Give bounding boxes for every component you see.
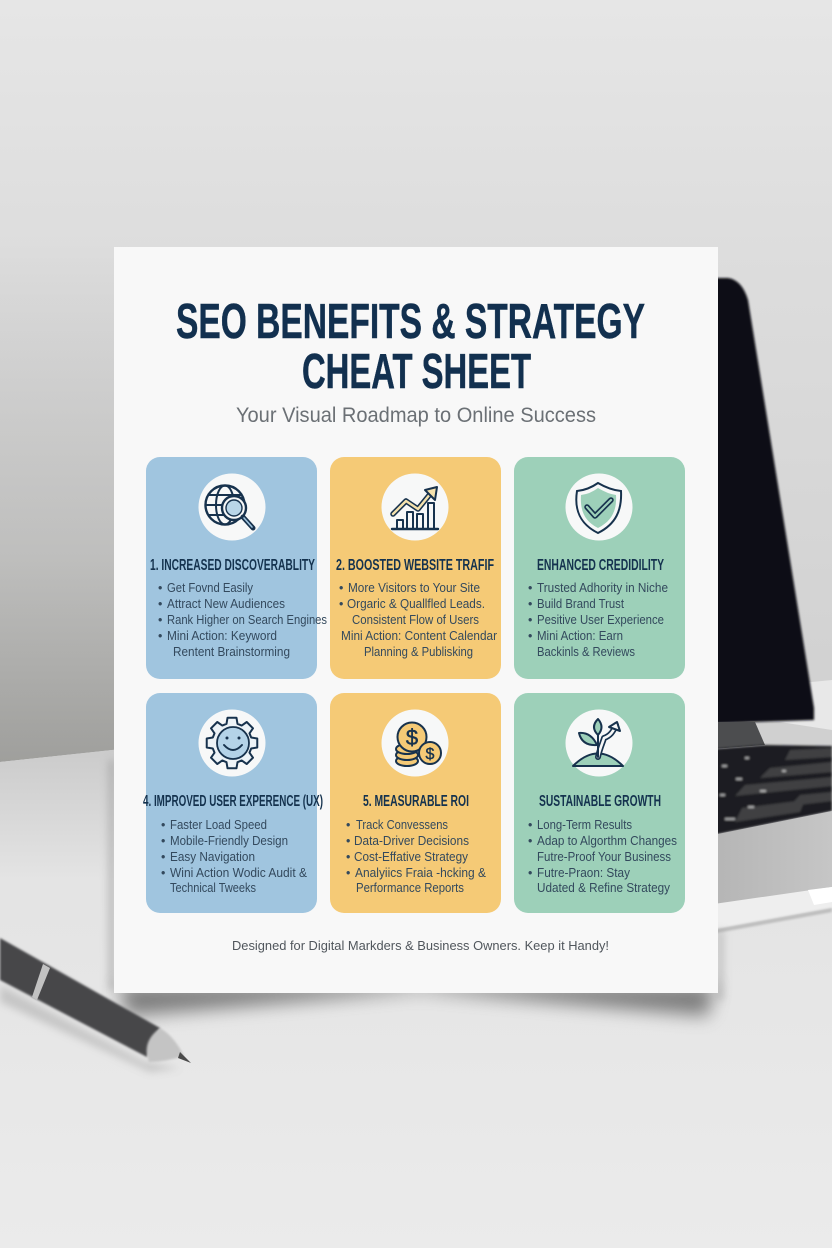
bullet list: •	[161, 866, 165, 880]
bullet list: •	[161, 850, 165, 864]
panel: 1 increased discoverability	[146, 457, 327, 679]
bullet list: Long-Term Results	[537, 818, 632, 832]
heading: ENHANCED CREDIDILITY	[537, 557, 664, 574]
bullet list: Data-Driver Decisions	[354, 834, 469, 848]
panel: 2 boosted website traffic	[330, 457, 501, 679]
bullet list: •	[161, 818, 165, 832]
title	[176, 295, 645, 399]
bullet list: •	[161, 834, 165, 848]
heading: SUSTAINABLE GROWTH	[539, 793, 661, 810]
bullet list: Attract New Audiences	[167, 597, 285, 611]
bullet list: Futre-Praon: Stay	[537, 866, 631, 880]
bullet list: Futre-Proof Your Business	[537, 850, 671, 864]
bullet list: More Visitors to Your Site	[348, 581, 480, 595]
bullet list: •	[158, 581, 162, 595]
bullet list: Mini Action: Content Calendar	[341, 629, 497, 643]
bullet list: •	[528, 581, 532, 595]
bullet list: Mobile-Friendly Design	[170, 834, 288, 848]
hinge	[700, 722, 765, 750]
bullet list: Consistent Flow of Users	[352, 613, 479, 627]
bullet list: Trusted Adhority in Niche	[537, 581, 668, 595]
bullet list: Backinls & Reviews	[537, 645, 635, 659]
heading: 4. IMPROVED USER EXPERENCE (UX)	[143, 793, 323, 810]
footer note: Designed for Digital Markders & Business Owners. Keep it Handy!	[232, 938, 609, 953]
bullet list: •	[528, 613, 532, 627]
icon: shield with check	[566, 474, 632, 540]
bullet list: Get Fovnd Easily	[167, 581, 254, 595]
bullet list: Mini Action: Earn	[537, 629, 623, 643]
bullet list: •	[528, 629, 532, 643]
bullet list: Easy Navigation	[170, 850, 255, 864]
panel: cheat sheet paper	[114, 247, 718, 993]
bullet list: Track Convessens	[356, 818, 448, 832]
bullet list: Rentent Brainstorming	[173, 645, 290, 659]
heading: 2. BOOSTED WEBSITE TRAFIF	[336, 557, 494, 574]
bullet list	[528, 818, 677, 895]
subtitle: Your Visual Roadmap to Online Success	[236, 404, 596, 427]
bullet list: •	[346, 818, 350, 832]
bullet list: •	[158, 629, 162, 643]
icon: growth chart	[382, 474, 448, 540]
bullet list: •	[528, 866, 532, 880]
bullet list: Orgaric & Quallfled Leads.	[347, 597, 485, 611]
bullet list: Mini Action: Keyword	[167, 629, 277, 643]
bullet list: •	[158, 597, 162, 611]
pen	[0, 938, 191, 1072]
palm rest	[700, 811, 832, 908]
pen barrel	[0, 938, 160, 1057]
pen band	[32, 964, 50, 1000]
bullet list	[158, 581, 327, 659]
bullet list: Performance Reports	[356, 881, 464, 895]
panel: 5 measurable roi	[330, 693, 501, 913]
icon: sprout with arrow	[566, 710, 632, 776]
panel: 3 enhanced credibility	[514, 457, 685, 679]
bullet list: •	[346, 850, 350, 864]
keyboard	[700, 745, 832, 836]
bullet list: Build Brand Trust	[537, 597, 624, 611]
panel: 6 sustainable growth	[514, 693, 685, 913]
laptop screen	[700, 278, 814, 724]
panel: 4 improved user experience	[143, 693, 323, 913]
bullet list: •	[339, 581, 343, 595]
sheet shadow	[108, 760, 724, 1016]
bullet list: •	[346, 834, 350, 848]
bullet list: •	[346, 866, 350, 880]
bullet list: •	[158, 613, 162, 627]
bullet list	[161, 818, 308, 895]
bullet list: Planning & Publisking	[364, 645, 473, 659]
bullet list: Rank Higher on Search Engines	[167, 613, 327, 627]
heading: 1. INCREASED DISCOVERABLITY	[150, 557, 315, 574]
icon: coins: $	[426, 746, 435, 763]
bullet list: Wini Action Wodic Audit &	[170, 866, 308, 880]
bullet list: Faster Load Speed	[170, 818, 267, 832]
pen tip	[147, 1028, 184, 1062]
bullet list: Cost-Effative Strategy	[354, 850, 469, 864]
laptop base	[700, 722, 832, 908]
bullet list	[346, 818, 487, 895]
bullet list: Pesitive User Experience	[537, 613, 664, 627]
bullet list: •	[339, 597, 343, 611]
bullet list	[339, 581, 497, 659]
icon: coins: $	[406, 725, 418, 750]
laptop	[700, 278, 832, 936]
bullet list	[528, 581, 668, 659]
bullet list: Adap to Algorthm Changes	[537, 834, 677, 848]
title: CHEAT SHEET	[302, 345, 531, 399]
bullet list: •	[528, 818, 532, 832]
bullet list: •	[528, 597, 532, 611]
bullet list: Technical Tweeks	[170, 881, 256, 895]
icon: gear with smile	[198, 710, 266, 776]
heading: 5. MEASURABLE ROI	[363, 793, 469, 810]
icon: globe with magnifier	[198, 474, 266, 540]
front lip	[700, 887, 832, 932]
bullet list: •	[528, 834, 532, 848]
bullet list: Analyiics Fraia -hcking &	[355, 866, 487, 880]
bullet list: Udated & Refine Strategy	[537, 881, 671, 895]
icon: coins	[382, 710, 448, 776]
